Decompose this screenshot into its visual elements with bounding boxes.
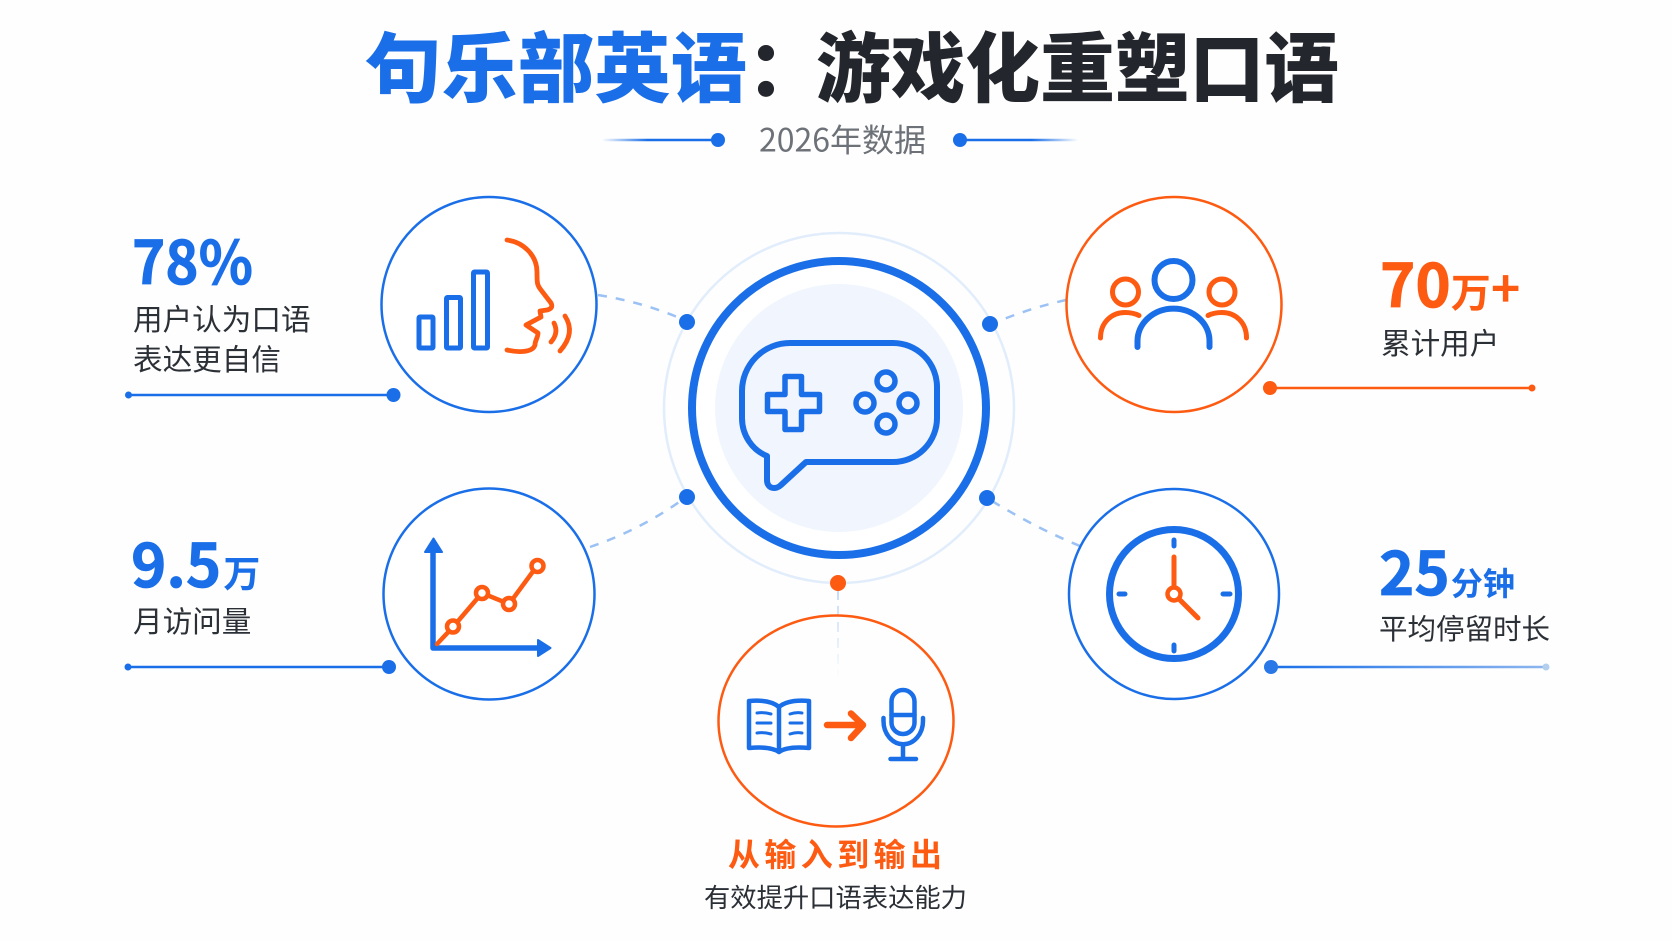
underline	[125, 388, 400, 402]
underline	[1264, 660, 1550, 674]
icon circle: line chart	[384, 488, 594, 700]
connector: top left	[598, 295, 682, 319]
text: total users: 累计用户	[1381, 320, 1499, 363]
stat: 78%: 78%	[132, 215, 253, 302]
stat: 25分钟: 25分钟	[1379, 526, 1515, 613]
arrow	[827, 714, 863, 738]
icon: speech bubble controller	[742, 343, 937, 488]
icon circle: users	[1066, 197, 1282, 412]
icon circle: clock	[1069, 489, 1279, 699]
stat: 9.5万: 9.5万	[131, 518, 260, 605]
panel: 9.5万 monthly visits	[124, 488, 594, 700]
panel: 78% confidence	[125, 197, 596, 412]
underline	[1263, 381, 1536, 395]
title: 游戏化重塑口语	[816, 8, 1339, 118]
icon circle: bars and speaking face	[382, 197, 596, 412]
connector: bottom right	[992, 501, 1080, 546]
subtitle: 2026 data: 2026年数据	[759, 116, 926, 162]
subtitle: 2026 data	[602, 116, 1078, 162]
stat: 70万+: 70万+	[1380, 238, 1520, 325]
icon: microphone	[884, 690, 923, 759]
title: 句乐部英语	[365, 8, 747, 118]
connector: bottom left	[590, 500, 682, 547]
connector: top right	[994, 300, 1066, 323]
icon: book	[749, 701, 809, 752]
text: average stay: 平均停留时长	[1379, 607, 1550, 648]
panel: 70万+ total users	[1066, 197, 1536, 412]
icon circle: book to microphone	[718, 616, 954, 826]
title: ：	[747, 8, 823, 118]
text: confidence description: 表达更自信	[133, 336, 281, 379]
connector: bottom	[837, 590, 839, 680]
central hub: game controller speech bubble	[664, 233, 1014, 583]
underline	[124, 660, 396, 674]
text: confidence description: 用户认为口语	[133, 296, 311, 339]
text: description: 有效提升口语表达能力	[704, 876, 967, 915]
connector nodes	[679, 314, 998, 591]
panel: 25分钟 average stay	[1069, 489, 1550, 699]
text: monthly visits: 月访问量	[133, 598, 251, 641]
panel: input to output	[704, 616, 967, 915]
heading: input to output: 从输入到输出	[728, 830, 946, 876]
title	[365, 8, 1339, 118]
